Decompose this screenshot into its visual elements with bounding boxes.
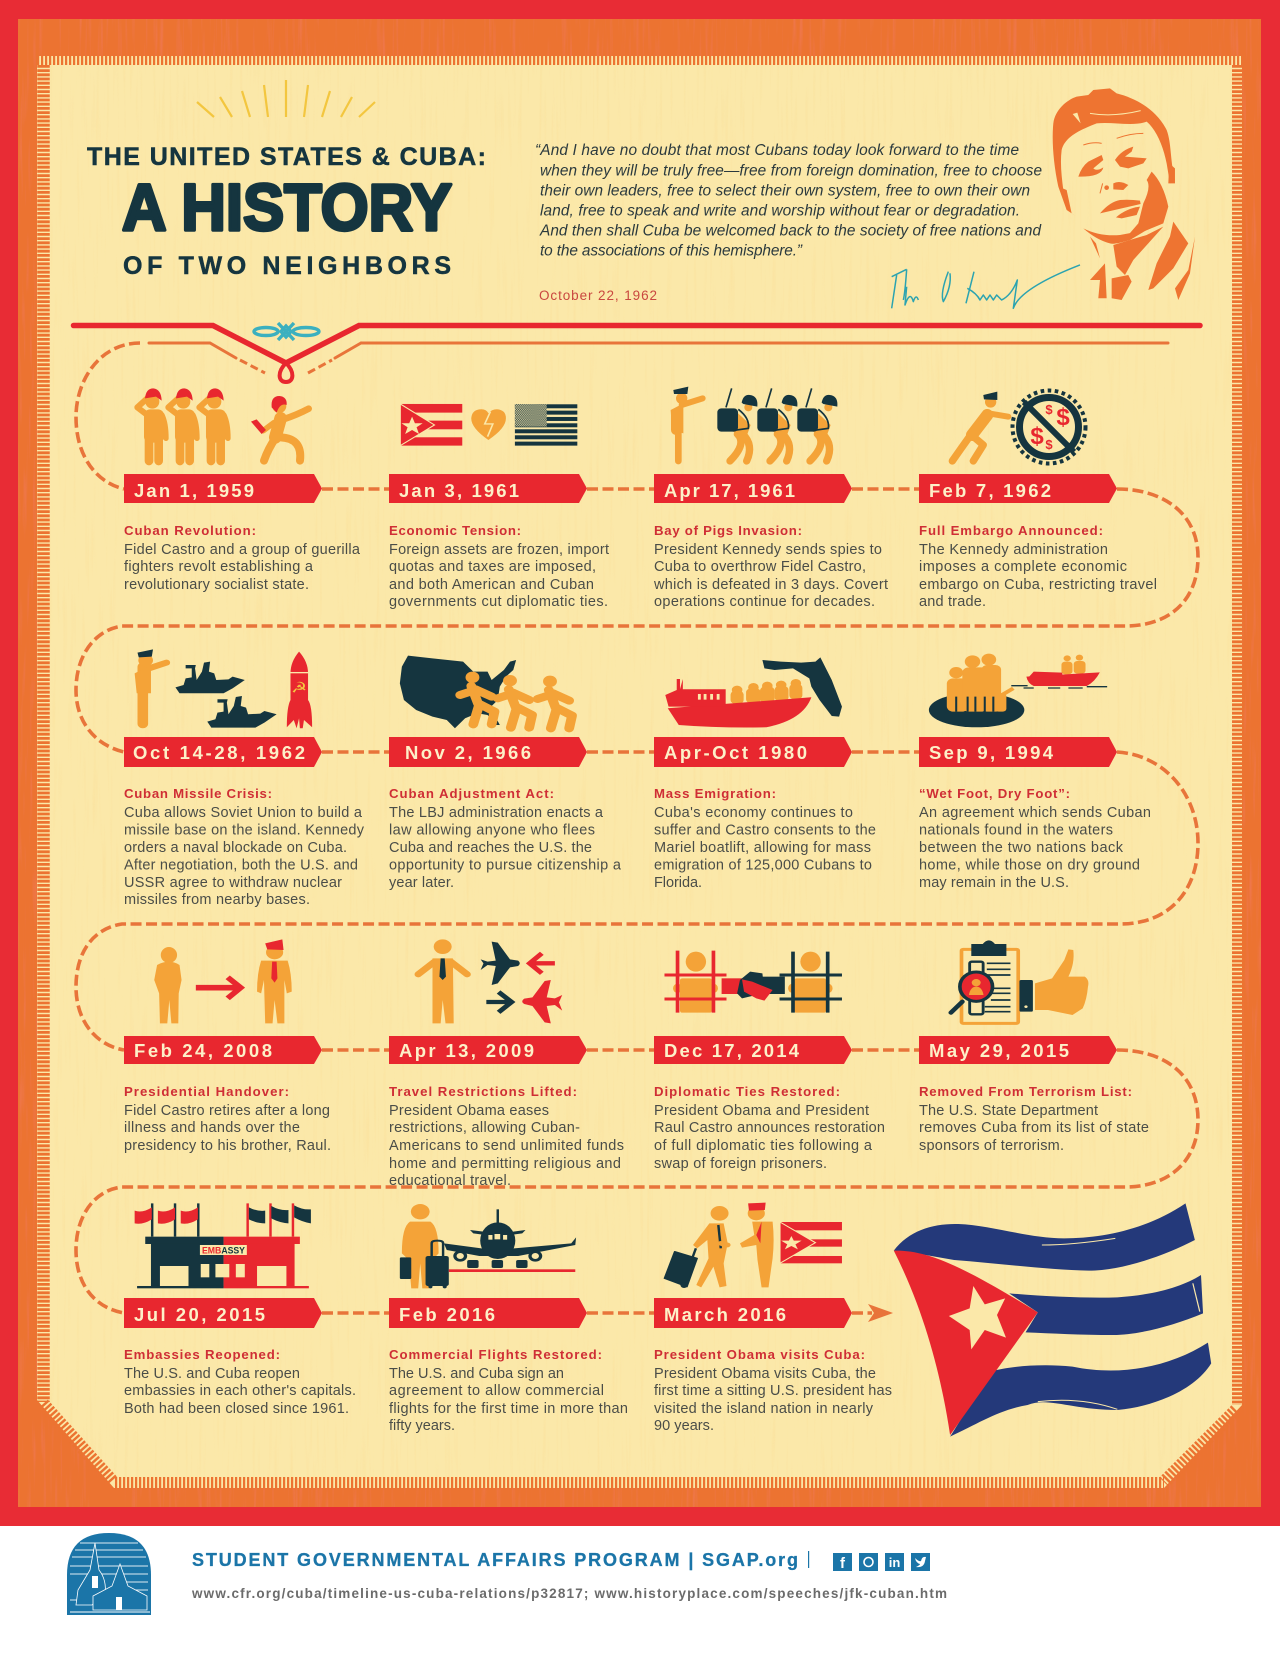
event: Jul 20, 2015 [124,1203,356,1417]
date badge [124,737,322,767]
event: Apr-Oct 1980 [654,657,876,891]
event text: President Kennedy sends spies to [654,542,882,558]
event text: embassies in each other's capitals. [124,1383,356,1399]
icon: man pushing no-money gear: $ [1045,402,1053,417]
icon: prisoners and handshake [664,951,842,1013]
event text: and both American and Cuban [389,577,594,593]
date badge: Jul 20, 2015 [134,1304,265,1325]
event: Jan 3, 1961 [389,404,609,610]
date badge [389,1036,587,1064]
event text: nationals found in the waters [919,822,1113,838]
event text: President Obama eases [389,1103,549,1119]
icon: man pushing no-money gear [952,390,1086,464]
JFK quote: land, free to speak and write and worship without fear or degradation. [540,202,1020,220]
icon: handover from Fidel to Raul [154,939,292,1023]
logo: Student Governmental Affairs Program [67,1533,151,1615]
date badge: Feb 7, 1962 [929,480,1051,501]
event text [389,1084,624,1189]
event text: “Wet Foot, Dry Foot”: [919,786,1070,801]
social icons: f [840,1555,846,1572]
date badge [654,737,852,767]
date badge: Dec 17, 2014 [664,1040,800,1061]
event text [654,1347,892,1434]
event text: The U.S. State Department [919,1103,1098,1119]
event text: Cuba allows Soviet Union to build a [124,805,363,821]
event text: Cuba to overthrow Fidel Castro, [654,559,866,575]
event text [124,1084,331,1154]
footer band [0,1526,1280,1656]
arrow to flag [868,1304,893,1322]
event text: first time a sitting U.S. president has [654,1383,892,1399]
event text [919,1084,1149,1154]
icon: man pushing no-money gear: $ [1056,404,1070,431]
event text: President Obama visits Cuba: [654,1347,865,1362]
event text: An agreement which sends Cuban [919,805,1151,821]
event text: Travel Restrictions Lifted: [389,1084,577,1099]
event: Apr 13, 2009 [389,939,624,1189]
event text: Commercial Flights Restored: [389,1347,602,1362]
title: A HISTORY [122,170,452,244]
event text: Embassies Reopened: [124,1347,280,1362]
date badge [919,474,1117,503]
event text: between the two nations back [919,840,1124,856]
JFK quote: to the associations of this hemisphere.” [540,242,803,260]
event text: Cuban Missile Crisis: [124,786,272,801]
event: Dec 17, 2014 [654,951,885,1172]
event text: Removed From Terrorism List: [919,1084,1132,1099]
date badge: March 2016 [664,1304,786,1325]
icon: Obama with planes and arrows [418,939,562,1023]
event text: restrictions, allowing Cuban- [389,1120,580,1136]
event text: sponsors of terrorism. [919,1138,1064,1154]
event: Sep 9, 1994 [919,654,1151,891]
event text: year later. [389,875,454,891]
event text: governments cut diplomatic ties. [389,594,608,610]
event text [124,1347,356,1417]
quote date: October 22, 1962 [539,288,657,303]
event text: opportunity to pursue citizenship a [389,858,622,874]
event text: 90 years. [654,1418,714,1434]
event: Feb 7, 1962 [919,390,1157,610]
date badge [919,1036,1117,1064]
event text [389,1347,628,1434]
event text: removes Cuba from its list of state [919,1120,1149,1136]
event text: suffer and Castro consents to the [654,822,876,838]
event text: Diplomatic Ties Restored: [654,1084,840,1099]
date badge [919,737,1117,767]
event text: Foreign assets are frozen, import [389,542,609,558]
source URLs: www.cfr.org/cuba/timeline-us-cuba-relations/p32817; www.historyplace.com/speeches/jfk-cuban.htm [191,1586,947,1601]
icon: US map with running figures [400,656,572,728]
event text: The Kennedy administration [919,542,1108,558]
event text: flights for the first time in more than [389,1401,628,1417]
event text: missile base on the island. Kennedy [124,822,365,838]
date badge: Feb 24, 2008 [134,1040,272,1061]
event text: Cuban Revolution: [124,523,256,538]
title [87,143,486,280]
event text: Full Embargo Announced: [919,523,1103,538]
event: May 29, 2015 [919,940,1149,1154]
event text [654,1084,885,1172]
event: Apr 17, 1961 [653,387,888,610]
icon: officer, warships, Soviet missile [135,649,312,728]
waving Cuban flag [894,1203,1211,1437]
event: Feb 2016 [389,1204,628,1434]
date badge: Apr 13, 2009 [399,1040,534,1061]
icon: officer and three soldiers [671,387,837,461]
decorative sun rays above title [197,80,375,117]
date badge [654,1298,852,1328]
timeline dashed route [76,343,1198,1313]
event text: home, while those on dry ground [919,858,1140,874]
social icons [833,1553,930,1572]
event text: swap of foreign prisoners. [654,1156,827,1172]
event text: of full diplomatic ties following a [654,1138,873,1154]
event text: emigration of 125,000 Cubans to [654,858,872,874]
icon: Obama with suitcase greeting Raul, Cuban flag [664,1203,842,1288]
event text: USSR agree to withdraw nuclear [124,875,342,891]
event text [389,523,609,610]
event text: embargo on Cuba, restricting travel [919,577,1157,593]
title: THE UNITED STATES & CUBA: [87,143,486,171]
event text: Cuba and reaches the U.S. the [389,840,592,856]
social icons: in [889,1555,900,1570]
icon: Mariel boat and Florida [665,657,842,728]
event text: home and permitting religious and [389,1156,621,1172]
event text: imposes a complete economic [919,559,1127,575]
JFK quote [535,142,1042,260]
event text: illness and hands over the [124,1120,300,1136]
date badge: Jan 1, 1959 [134,480,254,501]
event text [653,523,888,610]
date badge: Feb 2016 [399,1304,495,1325]
event text: presidency to his brother, Raul. [124,1138,331,1154]
event text: The LBJ administration enacts a [389,805,604,821]
event text: Mass Emigration: [654,786,776,801]
event text: fifty years. [389,1418,455,1434]
event text: which is defeated in 3 days. Covert [653,577,888,593]
JFK quote: “And I have no doubt that most Cubans today look forward to the time [535,142,1019,159]
date badge [654,474,852,503]
event text: revolutionary socialist state. [124,577,309,593]
date badge: Oct 14-28, 1962 [133,742,305,763]
icon: clipboard, magnifier and thumbs up [951,940,1088,1023]
footer heading: STUDENT GOVERNMENTAL AFFAIRS PROGRAM | SGAP.org [192,1550,798,1570]
icon: saluting guerillas and thrower [137,388,309,461]
event text: The U.S. and Cuba reopen [124,1366,300,1382]
event text [654,786,876,891]
event text: Cuban Adjustment Act: [389,786,554,801]
portrait: John F. Kennedy [1053,88,1195,300]
event text: Bay of Pigs Invasion: [654,523,802,538]
event text: Economic Tension: [389,523,521,538]
event text [919,523,1157,610]
event text: Fidel Castro and a group of guerilla [124,542,361,558]
event text: fighters revolt establishing a [124,559,314,575]
event text [919,786,1151,891]
event text: Mariel boatlift, allowing for mass [654,840,871,856]
event text: operations continue for decades. [654,594,875,610]
icon: traveller and airliner [400,1204,576,1288]
event text [124,786,365,908]
event text: educational travel. [389,1173,511,1189]
date badge [124,1298,322,1328]
event text: Presidential Handover: [124,1084,289,1099]
JFK quote: And then shall Cuba be welcomed back to the society of free nations and [539,222,1041,240]
event: Jan 1, 1959 [124,388,361,593]
icon: family on dry ground and boat on water [929,654,1107,727]
event text: may remain in the U.S. [919,875,1069,891]
header divider with knot [74,323,1200,382]
event text [389,786,622,891]
date badge: Jan 3, 1961 [399,480,519,501]
event text: President Obama visits Cuba, the [654,1366,876,1382]
date badge [389,1298,587,1328]
event: Oct 14-28, 1962 [124,649,365,908]
date badge [124,474,322,503]
icon: officer, warships, Soviet missile: ☭ [291,679,307,696]
icon: man pushing no-money gear: $ [1030,423,1044,450]
event text: orders a naval blockade on Cuba. [124,840,347,856]
event text: and trade. [919,594,986,610]
event: Feb 24, 2008 [124,939,331,1154]
event text: Both had been closed since 1961. [124,1401,349,1417]
date badge [124,1036,322,1064]
JFK quote: when they will be truly free—free from foreign domination, free to choose [540,162,1042,180]
event text: visited the island nation in nearly [654,1401,874,1417]
date badge: Sep 9, 1994 [929,742,1054,763]
icon: man pushing no-money gear: $ [1045,437,1053,452]
date badge: Apr-Oct 1980 [664,742,807,763]
event text: quotas and taxes are imposed, [389,559,596,575]
event text: Cuba's economy continues to [654,805,853,821]
event: Nov 2, 1966 [389,656,622,891]
event text: After negotiation, both the U.S. and [124,858,358,874]
date badge [389,474,587,503]
date badge [654,1036,852,1064]
JFK quote: their own leaders, free to select their own system, free to own their own [540,182,1030,200]
icon: embassy building with flags [135,1203,311,1288]
event text [124,523,361,593]
event text: agreement to allow commercial [389,1383,604,1399]
event text: Americans to send unlimited funds [389,1138,624,1154]
icon: Cuban flag, broken heart, US flag [400,404,577,446]
event text: Fidel Castro retires after a long [124,1103,330,1119]
embassy sign: EMBASSY [202,1246,246,1256]
event: March 2016 [654,1203,892,1434]
event text: President Obama and President [654,1103,869,1119]
event text: Raul Castro announces restoration [654,1120,885,1136]
date badge: Nov 2, 1966 [405,742,531,763]
event text: missiles from nearby bases. [124,892,310,908]
date badge: Apr 17, 1961 [664,480,795,501]
event text: law allowing anyone who flees [389,822,595,838]
date badge: May 29, 2015 [929,1040,1069,1061]
event text: The U.S. and Cuba sign an [389,1366,564,1382]
signature [892,265,1080,308]
event text: Florida. [654,875,702,891]
date badge [389,737,587,767]
title: OF TWO NEIGHBORS [123,252,451,280]
